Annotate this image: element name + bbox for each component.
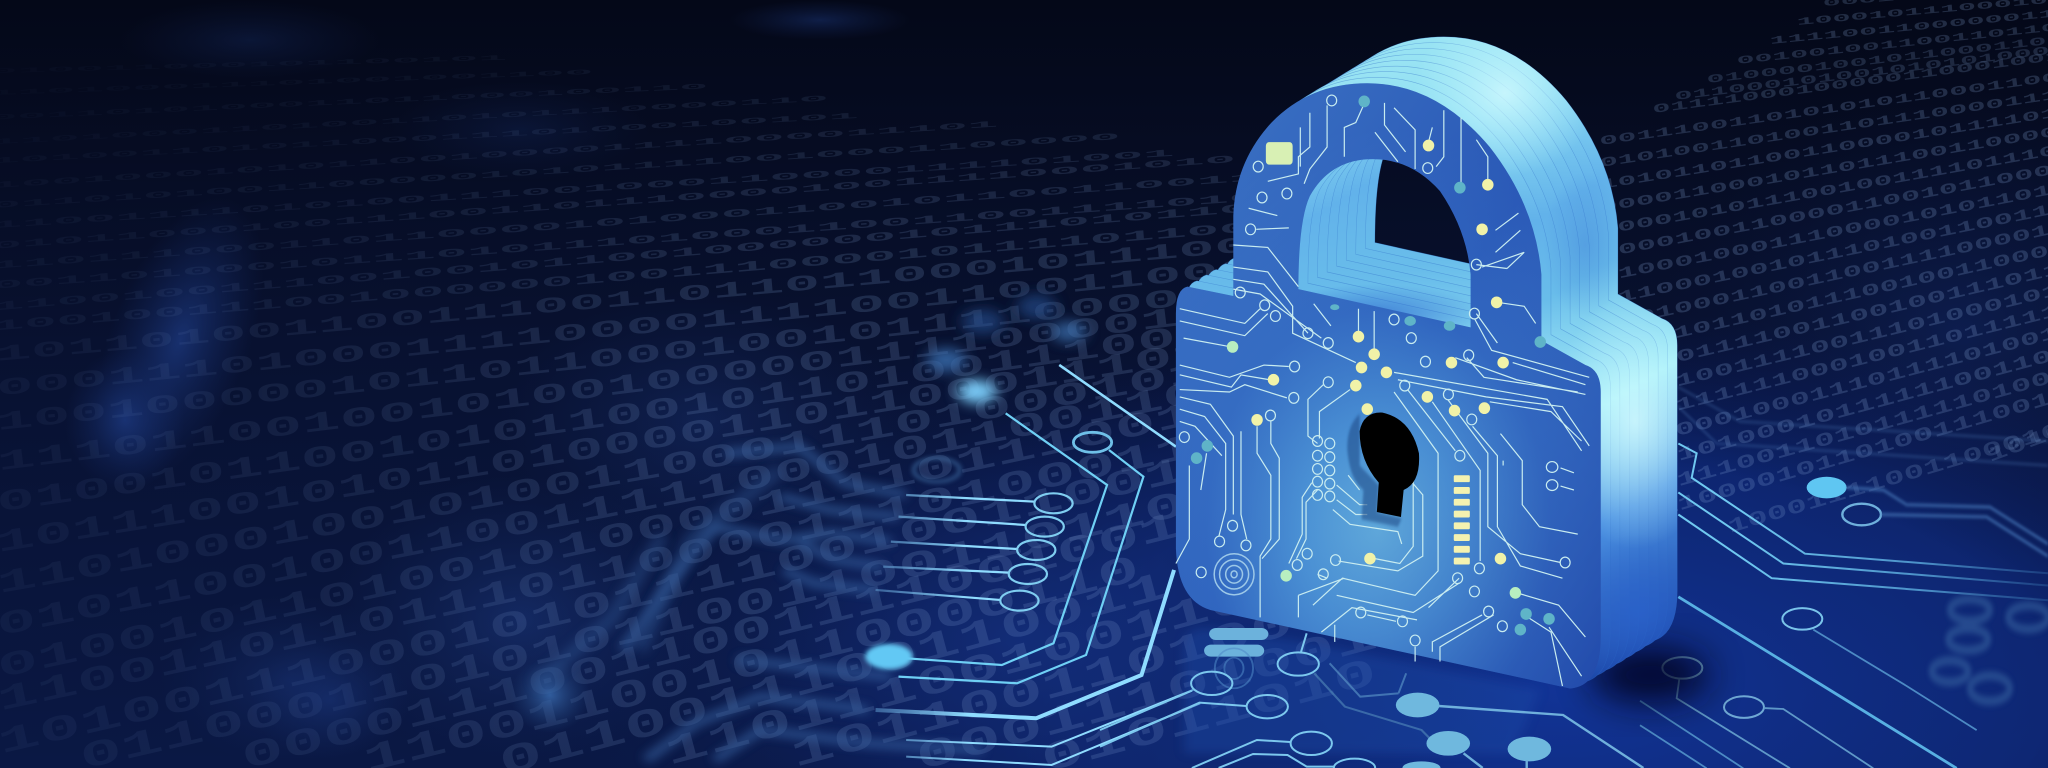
teal solder dots xyxy=(1191,96,1555,636)
blurred glow: lower left nodes xyxy=(250,470,780,760)
blurred ring xyxy=(914,458,960,482)
glowing nodes xyxy=(927,294,1086,404)
blurred background traces xyxy=(623,447,983,760)
padlock xyxy=(1176,36,1678,688)
chip xyxy=(1266,142,1293,165)
ring terminal xyxy=(1073,432,1112,452)
target rings xyxy=(1214,554,1254,595)
outer traces xyxy=(876,365,1200,765)
three long traces xyxy=(1678,443,2048,600)
binary code field, right xyxy=(1596,0,2048,539)
ladder contact bars xyxy=(1454,475,1470,564)
binary code field, left: 110010000010110110001001011110000111011 xyxy=(0,261,1403,442)
binary code field, left xyxy=(0,54,1403,768)
keyhole shadow xyxy=(1347,414,1402,527)
five ringed terminals xyxy=(876,493,1073,611)
circuit traces, right of lock xyxy=(1640,387,2048,768)
blurred upper traces xyxy=(1678,387,2048,466)
diagonal traces with rings xyxy=(1640,597,1977,768)
side highlights xyxy=(1268,10,1719,691)
ring cluster beside keyhole xyxy=(1313,436,1335,502)
front face shading xyxy=(1176,83,1601,688)
keyhole xyxy=(1360,413,1419,517)
extruded side layers xyxy=(1185,37,1677,683)
ring terminals xyxy=(1100,633,1375,768)
green solder dots xyxy=(1227,341,1521,599)
reflection panel xyxy=(1184,628,1540,753)
reflected bars xyxy=(1204,628,1268,657)
bright node xyxy=(865,644,913,669)
bright node and ring xyxy=(1807,477,2048,556)
floor reflection and traces below the lock xyxy=(1100,628,1643,768)
faded reflected trace xyxy=(1314,673,1444,753)
front face xyxy=(1176,83,1601,688)
circuit traces, left of lock xyxy=(623,294,1200,765)
ring pads xyxy=(1179,95,1570,646)
lock shadow xyxy=(1590,647,1710,703)
circuit traces on lock xyxy=(1176,95,1589,686)
binary code field, left: 10001110100011110000111100110011000111 xyxy=(0,244,1368,407)
reflected target xyxy=(1215,648,1253,688)
yellow solder dots xyxy=(1251,140,1509,564)
filled nodes xyxy=(1396,693,1643,768)
blurred ring cluster xyxy=(1932,599,2048,701)
